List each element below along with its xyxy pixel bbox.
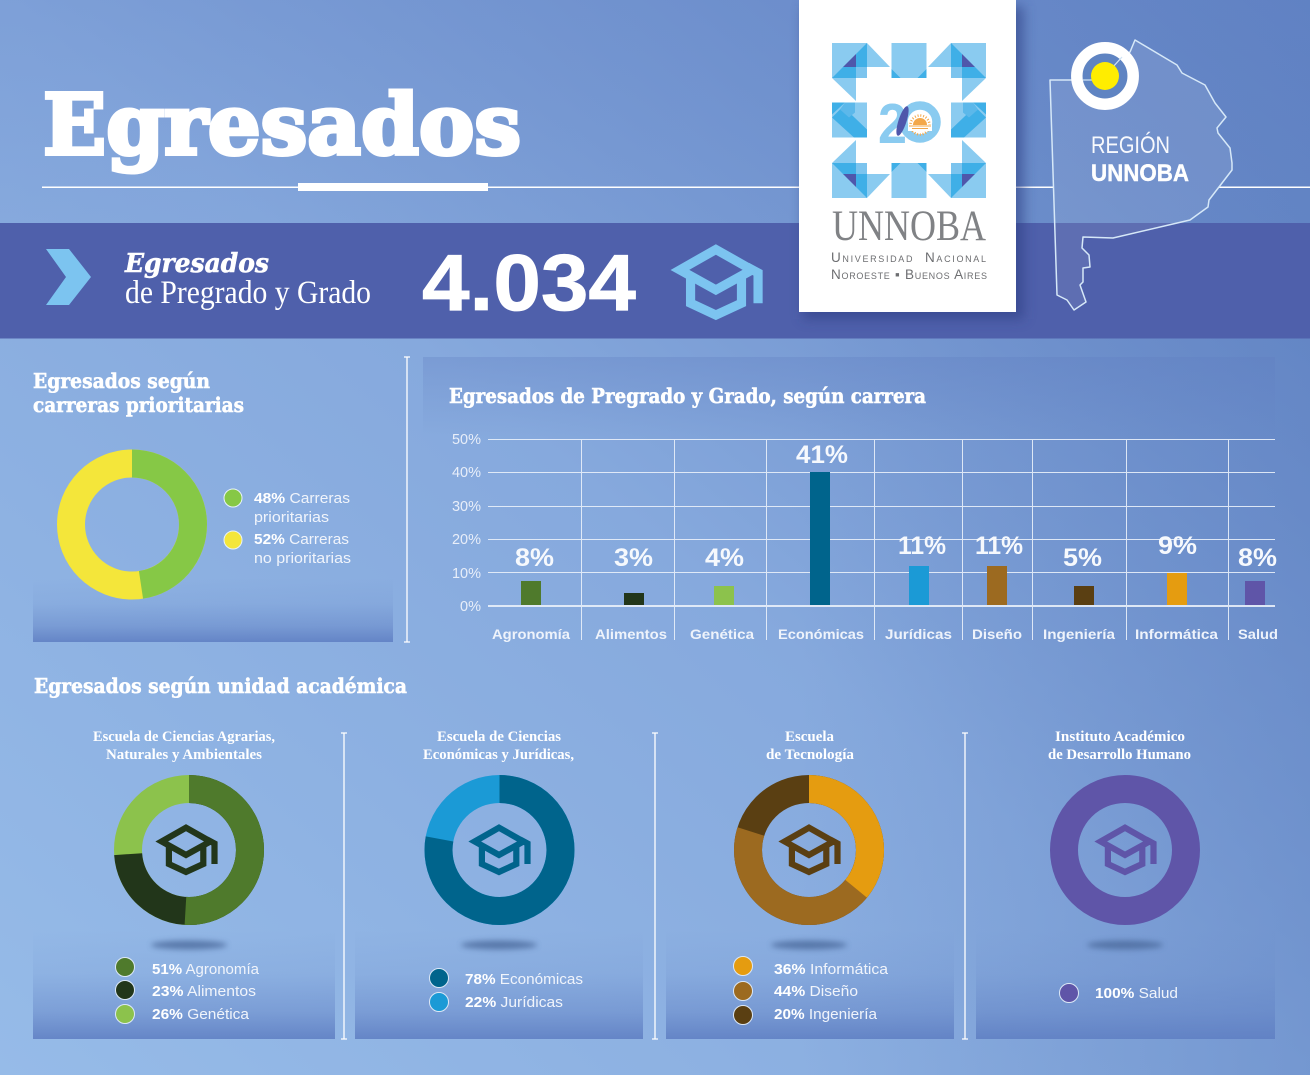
banner: total graduates bbox=[0, 223, 1310, 338]
heading bbox=[1048, 729, 1191, 763]
legend: 78% Económicas bbox=[465, 972, 583, 988]
total number: 4.034 bbox=[422, 238, 637, 327]
y axis labels: 10% bbox=[452, 566, 481, 582]
category labels: Informática bbox=[1135, 626, 1218, 642]
shadow bbox=[151, 940, 227, 950]
legend: 52% Carreras bbox=[254, 532, 349, 548]
category labels: Agronomía bbox=[492, 626, 570, 642]
y axis labels: 30% bbox=[452, 499, 481, 515]
category labels bbox=[492, 626, 1278, 642]
heading bbox=[423, 729, 574, 763]
heading bbox=[33, 369, 244, 417]
legend: 51% Agronomía bbox=[152, 962, 260, 978]
category labels: Ingeniería bbox=[1043, 626, 1115, 642]
region label bbox=[1091, 132, 1189, 187]
panel: Desarrollo Humano bbox=[976, 729, 1275, 1039]
logo subtitle: Noroeste ▪ Buenos Aires bbox=[831, 267, 987, 282]
shadow bbox=[1087, 940, 1163, 950]
heading: de Desarrollo Humano bbox=[1048, 747, 1191, 763]
heading bbox=[93, 729, 275, 763]
legend: 100% Salud bbox=[1095, 986, 1178, 1002]
region label: REGIÓN bbox=[1091, 132, 1170, 159]
bar values: 11% bbox=[898, 532, 946, 560]
legend bbox=[224, 489, 351, 567]
bar values: 41% bbox=[796, 441, 848, 469]
panel: bar chart bbox=[423, 357, 1278, 642]
legend: 23% Alimentos bbox=[152, 984, 256, 1000]
donut chart bbox=[438, 789, 560, 911]
logo subtitle: Universidad Nacional bbox=[831, 250, 986, 265]
map marker bbox=[1077, 48, 1133, 104]
bars bbox=[521, 472, 1265, 605]
region label: UNNOBA bbox=[1091, 160, 1189, 187]
logo number 20 bbox=[878, 92, 936, 156]
category labels: Salud bbox=[1238, 626, 1278, 642]
bar values: 8% bbox=[515, 544, 554, 572]
icon: chevron bbox=[46, 249, 91, 305]
map: province outline bbox=[1050, 40, 1232, 310]
legend bbox=[430, 968, 583, 1012]
heading: carreras prioritarias bbox=[33, 393, 244, 417]
y axis labels: 0% bbox=[460, 599, 481, 615]
logo mark bbox=[832, 43, 986, 198]
shadow bbox=[461, 940, 537, 950]
title rule bbox=[42, 183, 1310, 191]
category labels: Económicas bbox=[778, 626, 864, 642]
heading: Instituto Académico bbox=[1055, 729, 1185, 745]
section heading: Egresados según unidad académica bbox=[34, 674, 407, 698]
legend bbox=[734, 956, 889, 1024]
icon: graduation cap bbox=[680, 249, 758, 315]
panel: priority careers bbox=[33, 369, 393, 642]
bar values: 9% bbox=[1158, 532, 1197, 560]
category labels: Genética bbox=[690, 626, 754, 642]
bar values: 8% bbox=[1238, 544, 1277, 572]
icon: graduation cap bbox=[475, 828, 528, 872]
legend bbox=[1060, 984, 1178, 1002]
legend: 44% Diseño bbox=[774, 984, 858, 1000]
heading: Económicas y Jurídicas, bbox=[423, 747, 574, 763]
donut chart bbox=[1064, 789, 1186, 911]
panel: Ciencias Agrarias bbox=[33, 729, 335, 1039]
banner label: de Pregrado y Grado bbox=[125, 275, 371, 311]
bar values: 11% bbox=[975, 532, 1023, 560]
bar values: 4% bbox=[705, 544, 744, 572]
dividers bbox=[341, 733, 968, 1039]
legend: 48% Carreras bbox=[254, 491, 350, 507]
heading: Egresados según bbox=[33, 369, 210, 393]
divider bbox=[404, 357, 410, 642]
heading: Naturales y Ambientales bbox=[106, 747, 262, 763]
heading: Escuela bbox=[785, 729, 834, 745]
legend: no prioritarias bbox=[254, 551, 351, 567]
category labels: Diseño bbox=[972, 626, 1022, 642]
logo number 20: 2 bbox=[878, 92, 907, 156]
icon: graduation cap bbox=[785, 828, 838, 872]
banner label: Egresados bbox=[124, 249, 269, 279]
donut chart bbox=[748, 789, 870, 911]
panel: Ciencias Economicas bbox=[355, 729, 643, 1039]
bar values: 5% bbox=[1063, 544, 1102, 572]
bar values bbox=[515, 441, 1277, 572]
donut chart bbox=[128, 789, 250, 911]
heading bbox=[766, 729, 854, 763]
legend: 36% Informática bbox=[774, 962, 889, 978]
legend: 22% Jurídicas bbox=[465, 995, 563, 1011]
heading: Escuela de Ciencias Agrarias, bbox=[93, 729, 275, 745]
y axis labels: 40% bbox=[452, 465, 481, 481]
icon: graduation cap bbox=[1101, 828, 1154, 872]
donut chart bbox=[71, 464, 193, 586]
legend bbox=[116, 958, 260, 1024]
heading: de Tecnología bbox=[766, 747, 854, 763]
legend: 26% Genética bbox=[152, 1007, 250, 1023]
bar values: 3% bbox=[614, 544, 653, 572]
heading: Escuela de Ciencias bbox=[437, 729, 561, 745]
y axis labels bbox=[452, 432, 481, 615]
category labels: Alimentos bbox=[595, 626, 667, 642]
title: Egresados bbox=[43, 76, 521, 174]
legend: 20% Ingeniería bbox=[774, 1007, 878, 1023]
icon: graduation cap bbox=[162, 828, 214, 872]
shadow bbox=[771, 940, 847, 950]
category labels: Jurídicas bbox=[885, 626, 952, 642]
y axis labels: 20% bbox=[452, 532, 481, 548]
banner label bbox=[124, 249, 371, 311]
heading: Egresados de Pregrado y Grado, según carrera bbox=[449, 384, 926, 408]
logo wordmark: UNNOBA bbox=[832, 203, 986, 250]
logo subtitle bbox=[831, 250, 987, 282]
panel: Tecnologia bbox=[666, 729, 954, 1039]
y axis labels: 50% bbox=[452, 432, 481, 448]
grid bbox=[488, 439, 1275, 640]
legend: prioritarias bbox=[254, 510, 329, 526]
logo card bbox=[799, 0, 1024, 319]
